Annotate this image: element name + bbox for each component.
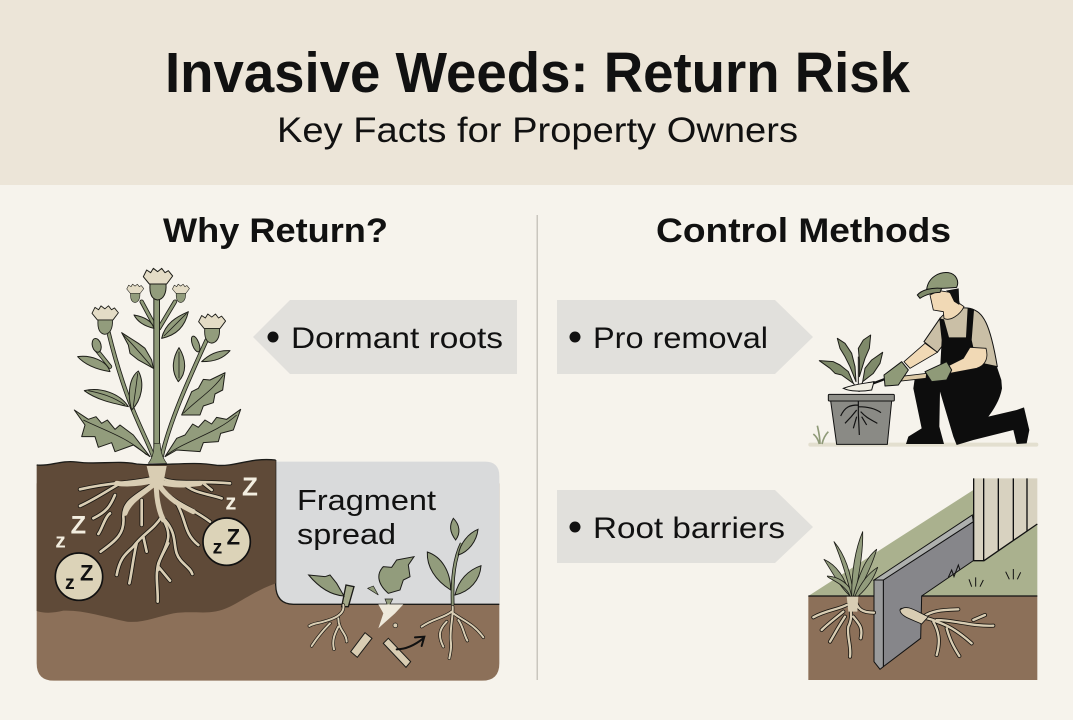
sleep letters right — [225, 471, 258, 514]
root past barrier — [900, 608, 993, 656]
dormant roots — [80, 470, 230, 602]
potted plant — [819, 335, 894, 444]
dormant bud left — [55, 553, 103, 600]
dormant bud right: Z — [227, 525, 240, 550]
callout: pro removal: Pro removal — [593, 322, 768, 355]
sleep letters right: z — [225, 489, 236, 514]
barrier wall — [874, 515, 973, 669]
icon: weed plant — [74, 268, 241, 463]
fragment spread panel — [275, 462, 499, 604]
dormant bud left: z — [65, 573, 75, 594]
weed behind barrier — [813, 532, 878, 657]
subtitle: Key Facts for Property Owners — [277, 111, 798, 150]
callout: root barriers: Root barriers — [593, 512, 785, 545]
regrown plant — [422, 518, 483, 658]
callout: root barriers — [557, 490, 813, 563]
header band — [0, 0, 1073, 185]
fragment spread label — [297, 485, 436, 551]
dark soil — [37, 460, 276, 622]
sleep letters left: z — [55, 529, 66, 552]
callout: dormant roots: Dormant roots — [291, 322, 503, 355]
soil panel with fragment spread — [37, 460, 499, 681]
heading: control methods: Control Methods — [656, 212, 951, 250]
icon: root barrier scene — [808, 478, 1037, 680]
dormant bud right — [203, 518, 250, 565]
sleep letters left — [55, 511, 86, 552]
gloves — [884, 362, 952, 386]
fragment broken plant — [309, 557, 414, 667]
sleep letters left: Z — [71, 511, 86, 539]
light soil — [37, 483, 499, 681]
fragment spread label: Fragment — [297, 485, 436, 517]
callout: dormant roots — [253, 300, 517, 374]
trowel — [843, 373, 927, 391]
sleep letters right: Z — [242, 471, 258, 501]
dormant bud right: z — [213, 537, 222, 558]
fence — [973, 478, 1037, 561]
fragment spread label: spread — [297, 519, 396, 551]
leaf veins — [83, 313, 237, 455]
worker — [904, 273, 1029, 445]
callout: pro removal — [557, 300, 813, 374]
arrow — [397, 637, 424, 649]
title: Invasive Weeds: Return Risk — [165, 41, 910, 105]
icon: worker removing plant from pot — [808, 273, 1038, 447]
heading: why return: Why Return? — [163, 212, 388, 250]
dormant bud left: Z — [80, 561, 93, 586]
